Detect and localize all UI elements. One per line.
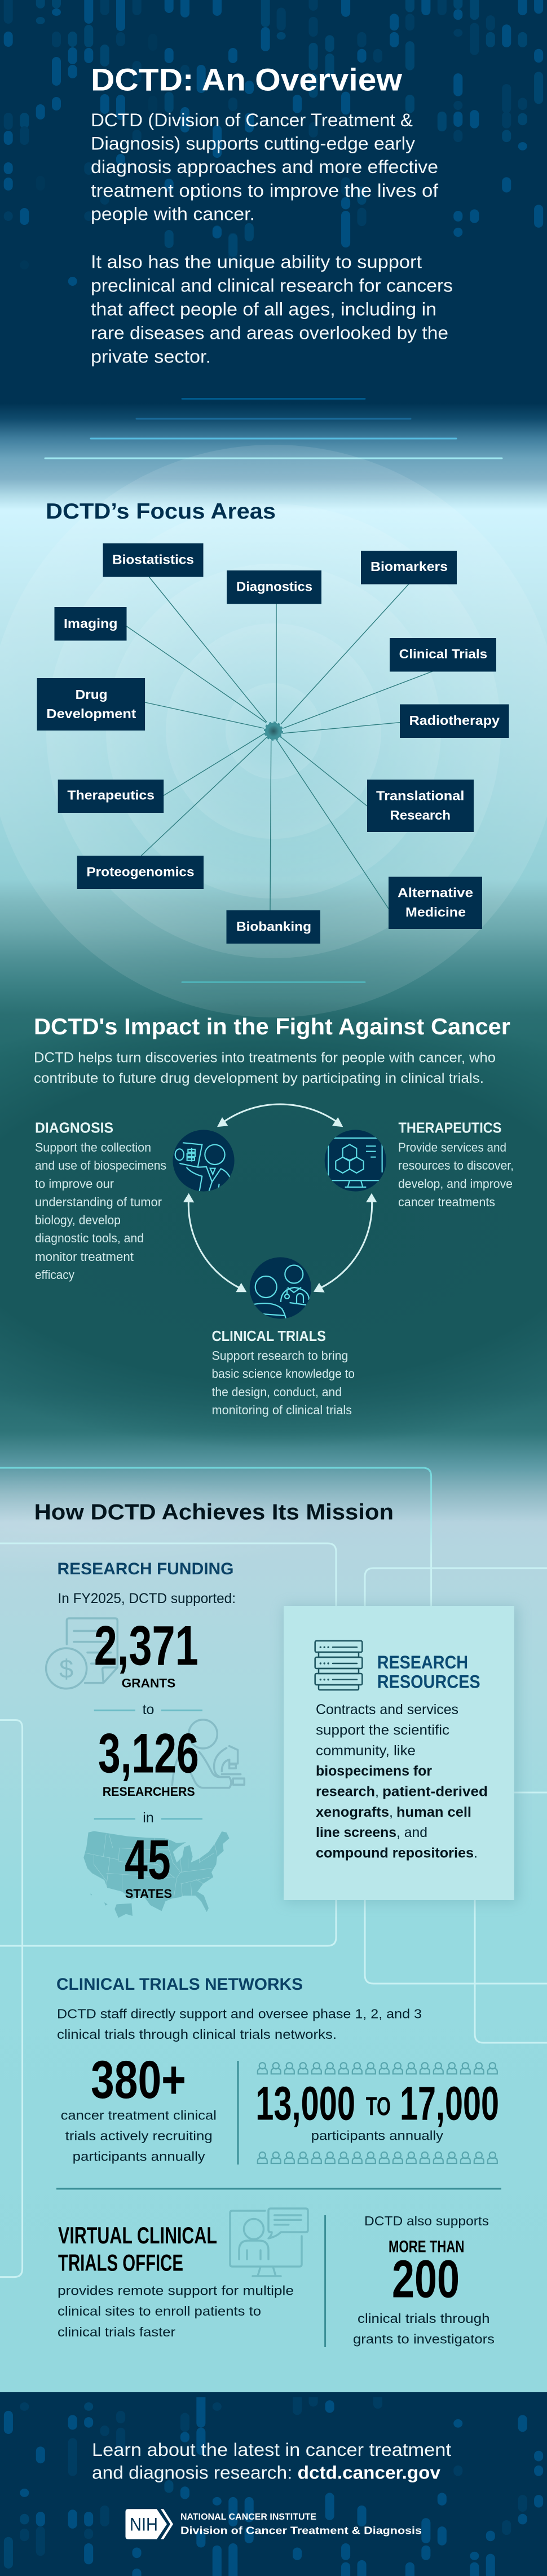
text: diagnosis: and use of biospecimens xyxy=(35,1158,166,1172)
text: clinical trials: monitoring of clinical trials xyxy=(212,1403,352,1417)
panel: section 3 dark teal backdrop xyxy=(0,998,547,1449)
radial diagram of focus areas xyxy=(37,543,509,944)
icons: row of people, bottom xyxy=(258,2152,497,2163)
stat: researchers xyxy=(98,1721,199,1799)
text: clinical trials xyxy=(212,1327,355,1417)
stat: states xyxy=(125,1829,172,1901)
hero intro paragraph: Diagnosis) supports cutting-edge early xyxy=(91,134,415,154)
heading: research resources xyxy=(377,1652,480,1692)
logo: NIH National Cancer Institute xyxy=(125,2509,422,2539)
footer pattern of data bars xyxy=(4,2392,543,2576)
text: research resources description: . xyxy=(474,1845,478,1861)
text: networks description xyxy=(57,2007,422,2042)
logo: NIH National Cancer Institute: NATIONAL CANCER INSTITUTE xyxy=(180,2512,316,2522)
text: therapeutics xyxy=(398,1119,514,1209)
text: therapeutics: Provide services and xyxy=(398,1140,506,1154)
text: research resources description: patient-derived xyxy=(382,1784,488,1800)
box: Drug Development: Development xyxy=(46,706,136,721)
text: learn more call to action: dctd.cancer.gov xyxy=(298,2463,440,2483)
stat: grants: 2,371 xyxy=(94,1614,198,1677)
impact intro text xyxy=(34,1050,496,1086)
stat: more than 200 trials xyxy=(353,2214,495,2346)
text: research resources description: xenografts xyxy=(316,1804,389,1820)
box: Therapeutics: Therapeutics xyxy=(67,787,155,802)
text: clinical trials: CLINICAL TRIALS xyxy=(212,1327,326,1344)
logo: NIH National Cancer Institute: Division of Cancer Treatment & Diagnosis xyxy=(180,2525,422,2537)
text: research resources description: , xyxy=(389,1804,393,1820)
stat: participants range: TO xyxy=(366,2091,391,2121)
stat: grants: GRANTS xyxy=(122,1676,175,1690)
box: Proteogenomics xyxy=(77,856,204,889)
text: learn more call to action: Learn about the latest in cancer treatment xyxy=(92,2440,451,2460)
stat: researchers: RESEARCHERS xyxy=(103,1785,195,1799)
box: Biomarkers xyxy=(361,551,457,584)
stat: more than 200 trials: DCTD also supports xyxy=(364,2214,489,2228)
text: diagnosis: DIAGNOSIS xyxy=(35,1119,113,1136)
text: therapeutics: develop, and improve xyxy=(398,1177,513,1190)
icon: researcher with microscope xyxy=(172,1720,244,1788)
connector lines xyxy=(126,577,433,910)
icon: virtual consultation monitor xyxy=(230,2208,308,2276)
text: virtual office description: clinical trials faster xyxy=(58,2325,175,2339)
text: research resources description: line screens xyxy=(316,1825,396,1840)
text: learn more call to action: and diagnosis research: xyxy=(92,2463,292,2483)
text: networks description: clinical trials through clinical trials networks. xyxy=(57,2027,337,2042)
connector: in: in xyxy=(143,1810,154,1826)
text: diagnosis: biology, develop xyxy=(35,1213,121,1227)
stat: more than 200 trials: MORE THAN xyxy=(389,2238,464,2256)
stat: 380+ trials xyxy=(61,2050,217,2164)
text: clinical trials: the design, conduct, and xyxy=(212,1385,342,1399)
text: diagnosis: Support the collection xyxy=(35,1140,151,1154)
cycle arrows xyxy=(183,1104,377,1293)
box: Imaging xyxy=(54,607,126,640)
text: research resources description: Contracts and services xyxy=(316,1702,458,1718)
box: Alternative Medicine xyxy=(389,877,482,929)
text: therapeutics: cancer treatments xyxy=(398,1195,495,1209)
box: Imaging: Imaging xyxy=(64,616,117,631)
box: Translational Research xyxy=(367,780,474,832)
text: research resources description: community, like xyxy=(316,1743,416,1759)
central hub xyxy=(265,723,282,740)
panel: clinical trials networks xyxy=(56,1975,501,2347)
text: research resources description: research xyxy=(316,1784,375,1800)
impact intro text: contribute to future drug development by participating in clinical trials. xyxy=(34,1070,484,1086)
heading: research resources: RESOURCES xyxy=(377,1671,480,1692)
hero second paragraph: that affect people of all ages, including in xyxy=(91,299,436,320)
hero second paragraph: private sector. xyxy=(91,347,211,367)
icon: grant document and dollar coin xyxy=(46,1618,117,1689)
panel: footer xyxy=(0,2392,547,2576)
title: DCTD: An Overview xyxy=(91,62,402,97)
box: Drug Development xyxy=(37,678,145,731)
text: diagnosis: efficacy xyxy=(35,1268,74,1282)
stat: participants range: 17,000 xyxy=(400,2077,499,2130)
stat: 380+ trials: 380+ xyxy=(91,2050,186,2110)
text: diagnosis: diagnostic tools, and xyxy=(35,1231,144,1245)
hero intro paragraph: DCTD (Division of Cancer Treatment & xyxy=(91,110,413,130)
stat: more than 200 trials: 200 xyxy=(392,2249,460,2309)
text: research resources description: biospecimens for xyxy=(316,1763,432,1779)
box: Radiotherapy: Radiotherapy xyxy=(409,713,500,728)
box: Biomarkers: Biomarkers xyxy=(370,559,448,574)
text: research resources description: human cell xyxy=(396,1804,471,1820)
stat: states: STATES xyxy=(125,1887,172,1901)
box: Clinical Trials: Clinical Trials xyxy=(399,647,487,661)
heading: mission: How DCTD Achieves Its Mission xyxy=(34,1500,394,1524)
text: virtual office description xyxy=(58,2283,294,2339)
text: research resources description: , xyxy=(375,1784,379,1800)
logo: NIH National Cancer Institute: NIH xyxy=(130,2514,158,2534)
box: Alternative Medicine: Medicine xyxy=(405,905,466,919)
icon: server stack xyxy=(315,1641,362,1690)
text: virtual office description: provides remote support for multiple xyxy=(58,2283,294,2298)
heading: focus areas: DCTD’s Focus Areas xyxy=(46,499,276,524)
stat: participants range xyxy=(255,2077,499,2143)
icon: grant document and dollar coin: $ xyxy=(59,1654,73,1684)
box: Translational Research: Research xyxy=(390,808,451,822)
box: Biostatistics: Biostatistics xyxy=(112,552,194,566)
heading: virtual clinical trials office: VIRTUAL CLINICAL xyxy=(58,2222,217,2249)
stat: 380+ trials: cancer treatment clinical xyxy=(61,2108,217,2122)
text: research resources description xyxy=(316,1702,488,1861)
stat: more than 200 trials: clinical trials through xyxy=(358,2311,489,2326)
text: research resources description: compound repositories xyxy=(316,1845,474,1861)
hero second paragraph xyxy=(91,252,453,367)
heading: virtual clinical trials office xyxy=(58,2222,217,2276)
icon: therapeutics monitor with molecule xyxy=(325,1130,386,1192)
box: Diagnostics: Diagnostics xyxy=(236,579,312,594)
box: Clinical Trials xyxy=(390,638,496,672)
box: Drug Development: Drug xyxy=(76,687,108,702)
stat: researchers: 3,126 xyxy=(98,1721,199,1784)
stat: states: 45 xyxy=(125,1829,171,1891)
box: Therapeutics xyxy=(58,780,164,813)
text: therapeutics: resources to discover, xyxy=(398,1158,514,1172)
box: Biobanking: Biobanking xyxy=(236,919,311,933)
hero intro paragraph xyxy=(91,110,438,224)
heading: virtual clinical trials office: TRIALS OFFICE xyxy=(58,2249,183,2276)
box: Diagnostics xyxy=(227,570,321,604)
text: learn more call to action xyxy=(92,2440,451,2483)
text: virtual office description: clinical sites to enroll patients to xyxy=(58,2304,261,2318)
panel: research resources xyxy=(284,1606,518,1903)
panel: hero pattern of data bars xyxy=(4,0,543,286)
box: Biobanking xyxy=(227,910,320,944)
hero intro paragraph: diagnosis approaches and more effective xyxy=(91,157,438,177)
text: networks description: DCTD staff directly support and oversee phase 1, 2, and 3 xyxy=(57,2007,422,2021)
concentric rings behind focus areas xyxy=(0,445,547,1017)
impact intro text: DCTD helps turn discoveries into treatments for people with cancer, who xyxy=(34,1050,496,1065)
stat: more than 200 trials: grants to investigators xyxy=(353,2331,495,2346)
stat: 380+ trials: trials actively recruiting xyxy=(65,2128,213,2143)
icon: clinical trials patient and doctor xyxy=(250,1257,311,1319)
text: clinical trials: Support research to bring xyxy=(212,1348,349,1362)
box: Radiotherapy xyxy=(400,705,509,738)
hero intro paragraph: people with cancer. xyxy=(91,204,255,224)
hero second paragraph: rare diseases and areas overlooked by the xyxy=(91,323,448,343)
text: fiscal year intro: In FY2025, DCTD supported: xyxy=(58,1591,236,1606)
heading: impact: DCTD's Impact in the Fight Against Cancer xyxy=(34,1013,510,1039)
stat: participants range: participants annually xyxy=(311,2128,443,2143)
text: diagnosis: to improve our xyxy=(35,1177,114,1190)
icon: diagnosis doctor with x-ray xyxy=(173,1130,235,1192)
text: research resources description: , and xyxy=(396,1825,427,1840)
box: Biostatistics xyxy=(103,543,203,577)
hero second paragraph: preclinical and clinical research for cancers xyxy=(91,276,453,296)
heading: clinical trials networks: CLINICAL TRIALS NETWORKS xyxy=(56,1975,303,1994)
icons: row of people, top xyxy=(258,2062,497,2074)
text: research resources description: support the scientific xyxy=(316,1723,449,1738)
text: diagnosis: monitor treatment xyxy=(35,1250,134,1264)
heading: research funding: RESEARCH FUNDING xyxy=(58,1560,233,1578)
stat: grants xyxy=(94,1614,198,1690)
heading: research resources: RESEARCH xyxy=(377,1652,468,1672)
box: Proteogenomics: Proteogenomics xyxy=(86,864,195,879)
stat: participants range: 13,000 xyxy=(255,2077,355,2130)
box: Translational Research: Translational xyxy=(376,788,464,803)
connector: to: to xyxy=(143,1702,154,1718)
box: Alternative Medicine: Alternative xyxy=(398,886,473,900)
text: therapeutics: THERAPEUTICS xyxy=(398,1119,502,1136)
stat: 380+ trials: participants annually xyxy=(73,2149,205,2164)
text: clinical trials: basic science knowledge to xyxy=(212,1367,355,1381)
text: diagnosis xyxy=(35,1119,166,1282)
mission section left glow xyxy=(0,1474,344,1575)
icon: map of the United States xyxy=(83,1831,230,1918)
hero intro paragraph: treatment options to improve the lives of xyxy=(91,180,438,201)
hero second paragraph: It also has the unique ability to support xyxy=(91,252,422,272)
panel: research funding xyxy=(46,1560,244,1918)
text: diagnosis: understanding of tumor xyxy=(35,1195,162,1209)
